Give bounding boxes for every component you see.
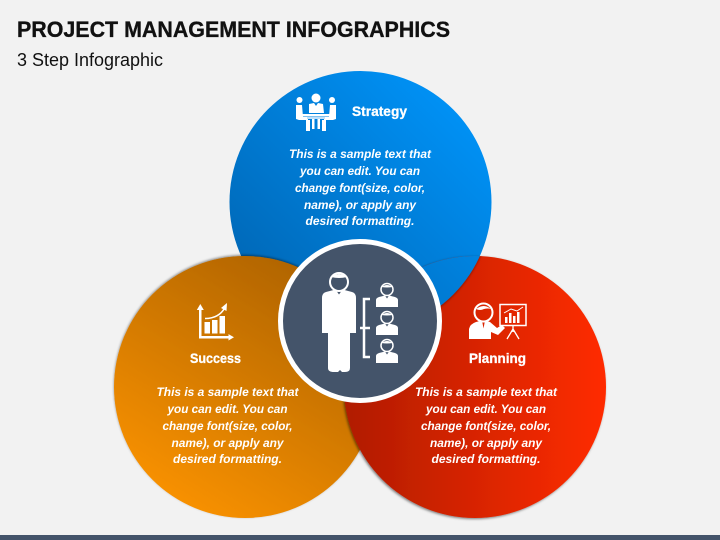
- circle: red: [344, 256, 606, 518]
- icon: leader with team: [322, 273, 398, 372]
- icon: meeting table: [296, 94, 336, 131]
- text: strategy body: [289, 147, 432, 228]
- heading: success: Success: [190, 350, 241, 366]
- panel: planning: [415, 304, 558, 466]
- subtitle: 3 Step Infographic: [17, 50, 163, 70]
- team members: [376, 284, 398, 363]
- text: success body: This is a sample text that: [156, 385, 299, 399]
- text: strategy body: name), or apply any: [304, 198, 417, 212]
- text: planning body: name), or apply any: [430, 436, 543, 450]
- circle: blue base: [230, 71, 492, 333]
- icon: growth chart: [197, 303, 234, 340]
- heading: planning: Planning: [469, 350, 526, 366]
- text: success body: [156, 385, 299, 466]
- footer bar: [0, 535, 720, 540]
- text: planning body: This is a sample text that: [415, 385, 558, 399]
- text: planning body: [415, 385, 558, 466]
- panel: success: [156, 303, 299, 466]
- text: strategy body: change font(size, color,: [295, 181, 425, 195]
- text: success body: change font(size, color,: [162, 419, 292, 433]
- text: planning body: desired formatting.: [432, 452, 540, 466]
- text: strategy body: you can edit. You can: [299, 164, 420, 178]
- text: strategy body: desired formatting.: [306, 214, 414, 228]
- text: success body: name), or apply any: [172, 436, 285, 450]
- text: success body: you can edit. You can: [167, 402, 288, 416]
- text: planning body: change font(size, color,: [421, 419, 551, 433]
- heading: strategy: Strategy: [352, 103, 407, 119]
- text: success body: desired formatting.: [173, 452, 282, 466]
- title: PROJECT MANAGEMENT INFOGRAPHICS: [17, 17, 450, 42]
- center badge: [280, 242, 440, 400]
- circle: blue overlap over red: [422, 256, 482, 308]
- leader: [322, 273, 356, 372]
- circle: orange: [114, 256, 376, 518]
- bracket: [360, 299, 370, 357]
- icon: presenter with board: [469, 304, 526, 339]
- panel: strategy: [289, 94, 432, 228]
- text: strategy body: This is a sample text that: [289, 147, 432, 161]
- text: planning body: you can edit. You can: [425, 402, 546, 416]
